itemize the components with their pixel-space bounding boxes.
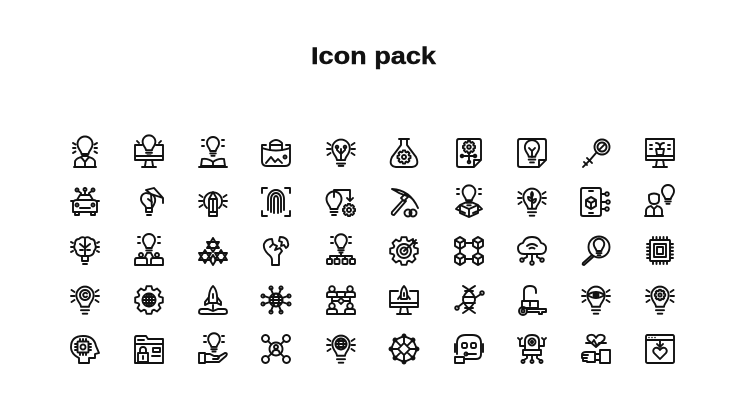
icon: broken bulb <box>264 237 288 265</box>
icon: DNA helix <box>455 286 484 313</box>
icon: pencil in bulb <box>199 192 227 216</box>
icon: VR headset landscape <box>262 140 290 166</box>
icon: bulb org chart <box>327 234 355 264</box>
icon: globe bulb <box>327 336 355 363</box>
icon: magnifier with bulb <box>583 236 610 265</box>
icon: bulb with graduation cap <box>141 188 163 215</box>
icon: hand holding bulb <box>199 333 227 363</box>
icon: wheel network <box>390 334 418 364</box>
icon: person with idea bulb <box>73 136 97 167</box>
icon: gear with globe <box>135 286 163 314</box>
icon: browser with heart <box>646 335 674 363</box>
icon: open book with bulb <box>199 137 227 167</box>
icon: pickaxe and coins <box>392 189 418 216</box>
icon: note with bulb <box>518 139 546 167</box>
icon: bulb with people <box>135 234 163 265</box>
icon: eye bulb <box>582 287 610 314</box>
icon: car with circuit <box>71 188 99 215</box>
icon: open lock with key <box>519 286 546 315</box>
title: Icon pack <box>311 43 437 70</box>
icon: phone with network <box>581 188 610 216</box>
icon: robot <box>518 335 546 363</box>
icon: monitor with bulb <box>135 135 163 167</box>
icon: monitor with rocket <box>390 286 418 314</box>
icon: triple star triangles <box>199 238 227 265</box>
icon: gear bulb <box>646 287 674 314</box>
icon: fingerprint scan <box>262 188 290 216</box>
icon: robot head support <box>455 335 483 363</box>
icon: connected cubes <box>455 237 483 265</box>
icon: box with bulb <box>456 185 482 217</box>
icon: rocket launch <box>199 286 227 314</box>
icon: microchip <box>647 237 673 264</box>
icon: brain bulb <box>71 237 99 264</box>
icon: gear with target <box>390 237 418 265</box>
icon: bulb with circuit <box>327 140 355 166</box>
icon: bulb with sprout <box>518 189 546 216</box>
icon: globe network <box>261 286 291 314</box>
icon: copyright bulb <box>71 287 99 314</box>
icon: head with chip <box>71 336 99 363</box>
icon: locked folder <box>135 336 163 363</box>
icon: people network <box>327 286 355 314</box>
icon: monitor with plant <box>646 139 674 167</box>
icon: magnifier with no sign <box>583 140 610 167</box>
icon: person with bulb <box>645 185 674 216</box>
icon: wifi cloud <box>518 237 546 265</box>
icon: bulb, arrow and gear <box>326 190 355 216</box>
icon: document with gear network <box>457 139 481 167</box>
icon: person network <box>262 335 290 363</box>
icon: flask with gear <box>391 139 417 167</box>
icon: health wristband <box>582 335 610 363</box>
